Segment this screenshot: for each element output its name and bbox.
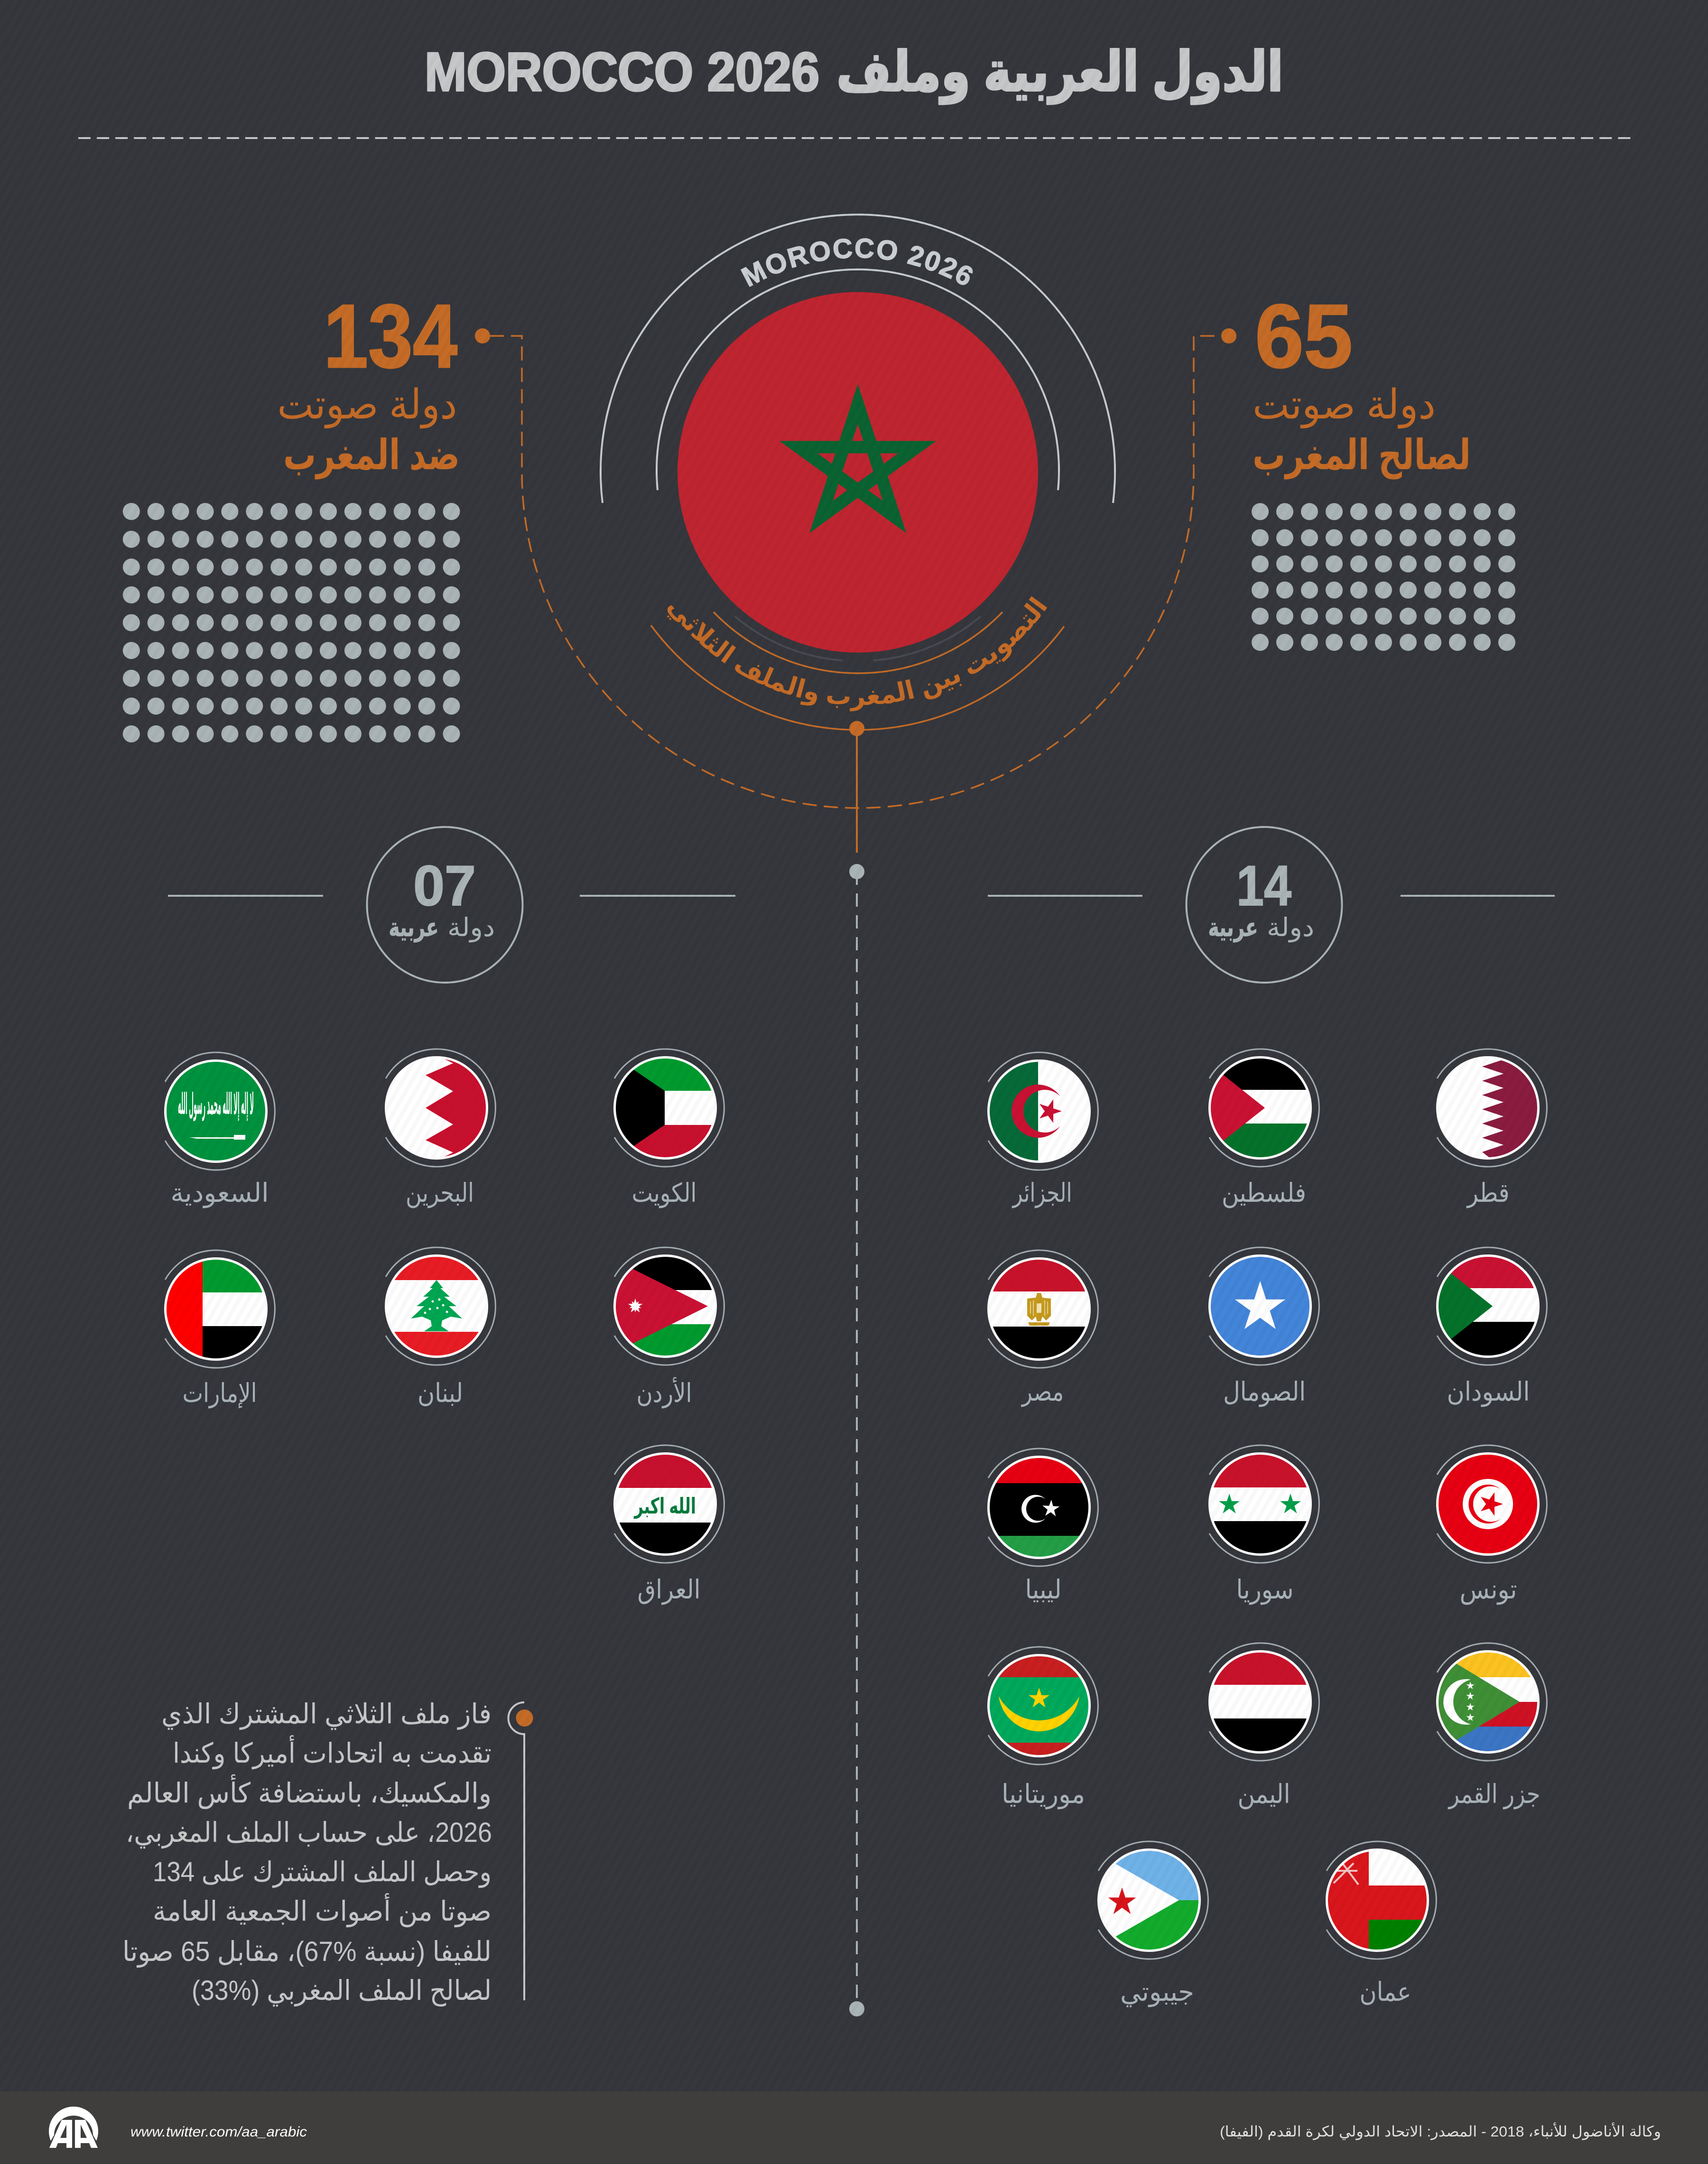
- flag: Bahrain: البحرين: [406, 1178, 474, 1208]
- logo AA: [49, 2107, 98, 2148]
- section header: 14 Arab countries: [988, 827, 1555, 983]
- flag: Lebanon: لبنان: [418, 1378, 463, 1408]
- flag: Djibouti: [1092, 1841, 1208, 2007]
- bracket line: [509, 1702, 524, 2000]
- flag: Mauritania: موريتانيا: [1002, 1779, 1085, 1809]
- URL: www.twitter.com/aa_arabic: [130, 2124, 307, 2140]
- flag: Kuwait: [608, 1049, 724, 1208]
- connector dot left: [475, 328, 490, 344]
- text: in favour of Morocco: لصالح المغرب: [1253, 431, 1471, 479]
- ghost arcs: [735, 616, 981, 660]
- caption: عربية: [389, 913, 438, 942]
- flag: Mauritania: [987, 1647, 1098, 1809]
- flag: Yemen: اليمن: [1237, 1779, 1290, 1809]
- orange arcs: [651, 612, 1064, 730]
- flag: Tunisia: [1436, 1445, 1547, 1605]
- flag: Libya: [987, 1449, 1098, 1604]
- flag: Sudan: السودان: [1447, 1377, 1530, 1407]
- title: MOROCCO 2026: [425, 42, 819, 102]
- caption: دولة: [1267, 913, 1314, 942]
- paragraph: لصالح الملف المغربي (%33): [192, 1975, 492, 2007]
- flag: Comoros: جزر القمر: [1448, 1779, 1540, 1809]
- flag: Kuwait: الكويت: [632, 1178, 696, 1208]
- paragraph: وحصل الملف المشترك على 134: [153, 1857, 492, 1888]
- flag: Qatar: قطر: [1466, 1178, 1510, 1208]
- text: countries voted right: دولة صوتت: [1253, 382, 1436, 428]
- flag: Sudan: [1436, 1247, 1547, 1407]
- flag: Libya: ليبيا: [1025, 1575, 1062, 1604]
- title: الدول العربية وملف: [836, 41, 1283, 104]
- paragraph: للفيفا (نسبة %67)، مقابل 65 صوتا: [122, 1936, 492, 1968]
- section header: 07 Arab countries: [168, 827, 735, 983]
- paragraph: تقدمت به اتحادات أميركا وكندا: [173, 1735, 492, 1770]
- flag: Egypt: [987, 1250, 1098, 1407]
- flag: Algeria: الجزائر: [1012, 1178, 1072, 1208]
- flag: Palestine: [1208, 1049, 1319, 1208]
- number 65: 65: [1255, 286, 1353, 387]
- Moroccan flag disc: [678, 292, 1038, 653]
- flag: Iraq: [613, 1445, 724, 1605]
- flag: Djibouti: جيبوتي: [1120, 1977, 1194, 2007]
- flag: Lebanon: [384, 1247, 495, 1408]
- summary text block: [122, 1699, 533, 2007]
- curved text MOROCCO 2026: MOROCCO 2026: [737, 233, 979, 293]
- flag: Comoros: [1436, 1643, 1547, 1809]
- flag: Syria: [1208, 1445, 1319, 1605]
- paragraph: فاز ملف الثلاثي المشترك الذي: [161, 1699, 492, 1730]
- flag: Somalia: الصومال: [1223, 1377, 1306, 1407]
- paragraph: والمكسيك، باستضافة كأس العالم: [127, 1774, 492, 1810]
- number 14: 14: [1236, 854, 1291, 918]
- flag: UAE: الإمارات: [182, 1378, 257, 1409]
- flag: Syria: سوريا: [1236, 1575, 1293, 1605]
- text: countries voted: دولة صوتت: [277, 382, 457, 428]
- panel: votes against Morocco: [119, 286, 490, 748]
- caption: [389, 913, 495, 942]
- panel: votes for Morocco: [1221, 286, 1519, 655]
- orange node and stem: [849, 721, 864, 853]
- flag: Oman: عمان: [1360, 1977, 1411, 2006]
- paragraph: 2026، على حساب الملف المغربي،: [126, 1817, 492, 1849]
- flag: Jordan: الأردن: [637, 1377, 692, 1408]
- connector dot right: [1221, 328, 1236, 344]
- green pentagram: [798, 404, 917, 517]
- flag: Iraq: الله اكبر: [634, 1494, 696, 1519]
- paragraph: [122, 1699, 492, 2007]
- flag: Qatar: [1436, 1049, 1547, 1208]
- central gray timeline: [849, 864, 864, 2016]
- flag: Somalia: [1208, 1247, 1319, 1407]
- caption: عربية: [1208, 913, 1258, 942]
- flag: Bahrain: [385, 1049, 495, 1208]
- number 07: 07: [413, 854, 476, 918]
- central Morocco emblem: [601, 214, 1115, 853]
- flag: Algeria: [987, 1052, 1098, 1208]
- flag: Tunisia: تونس: [1459, 1575, 1517, 1605]
- text: against Morocco: ضد المغرب: [283, 431, 460, 479]
- orange dashed connector arc: [490, 336, 1226, 808]
- paragraph: صوتا من أصوات الجمعية العامة: [153, 1893, 492, 1928]
- caption: [1208, 913, 1314, 942]
- flag: Yemen: [1208, 1643, 1319, 1809]
- title: [425, 41, 1283, 104]
- footer: [0, 2091, 1708, 2164]
- flag: Saudi Arabia: السعودية: [171, 1178, 269, 1208]
- dot grid 65: [1248, 499, 1519, 655]
- white arcs: [601, 214, 1115, 503]
- orange bullet: [516, 1709, 533, 1727]
- dot grid 134: [119, 498, 464, 748]
- flag: Saudi Arabia: [164, 1052, 275, 1208]
- flag: UAE: [164, 1250, 275, 1409]
- caption: دولة: [447, 913, 495, 942]
- flag: Palestine: فلسطين: [1222, 1178, 1306, 1208]
- number 134: 134: [324, 286, 457, 387]
- flag: Egypt: مصر: [1021, 1377, 1064, 1407]
- source credit: وكالة الأناضول للأنباء، 2018 - المصدر: الاتحاد الدولي لكرة القدم (الفيفا): [1220, 2122, 1661, 2140]
- flag: Oman: [1325, 1841, 1436, 2006]
- curved Arabic text: التصويت بين المغرب والملف الثلاثي: [662, 592, 1053, 711]
- flag: Iraq: العراق: [638, 1575, 700, 1605]
- flag: Jordan: [613, 1247, 724, 1408]
- text: لا إله إلا الله محمد رسول الله: [178, 1088, 254, 1121]
